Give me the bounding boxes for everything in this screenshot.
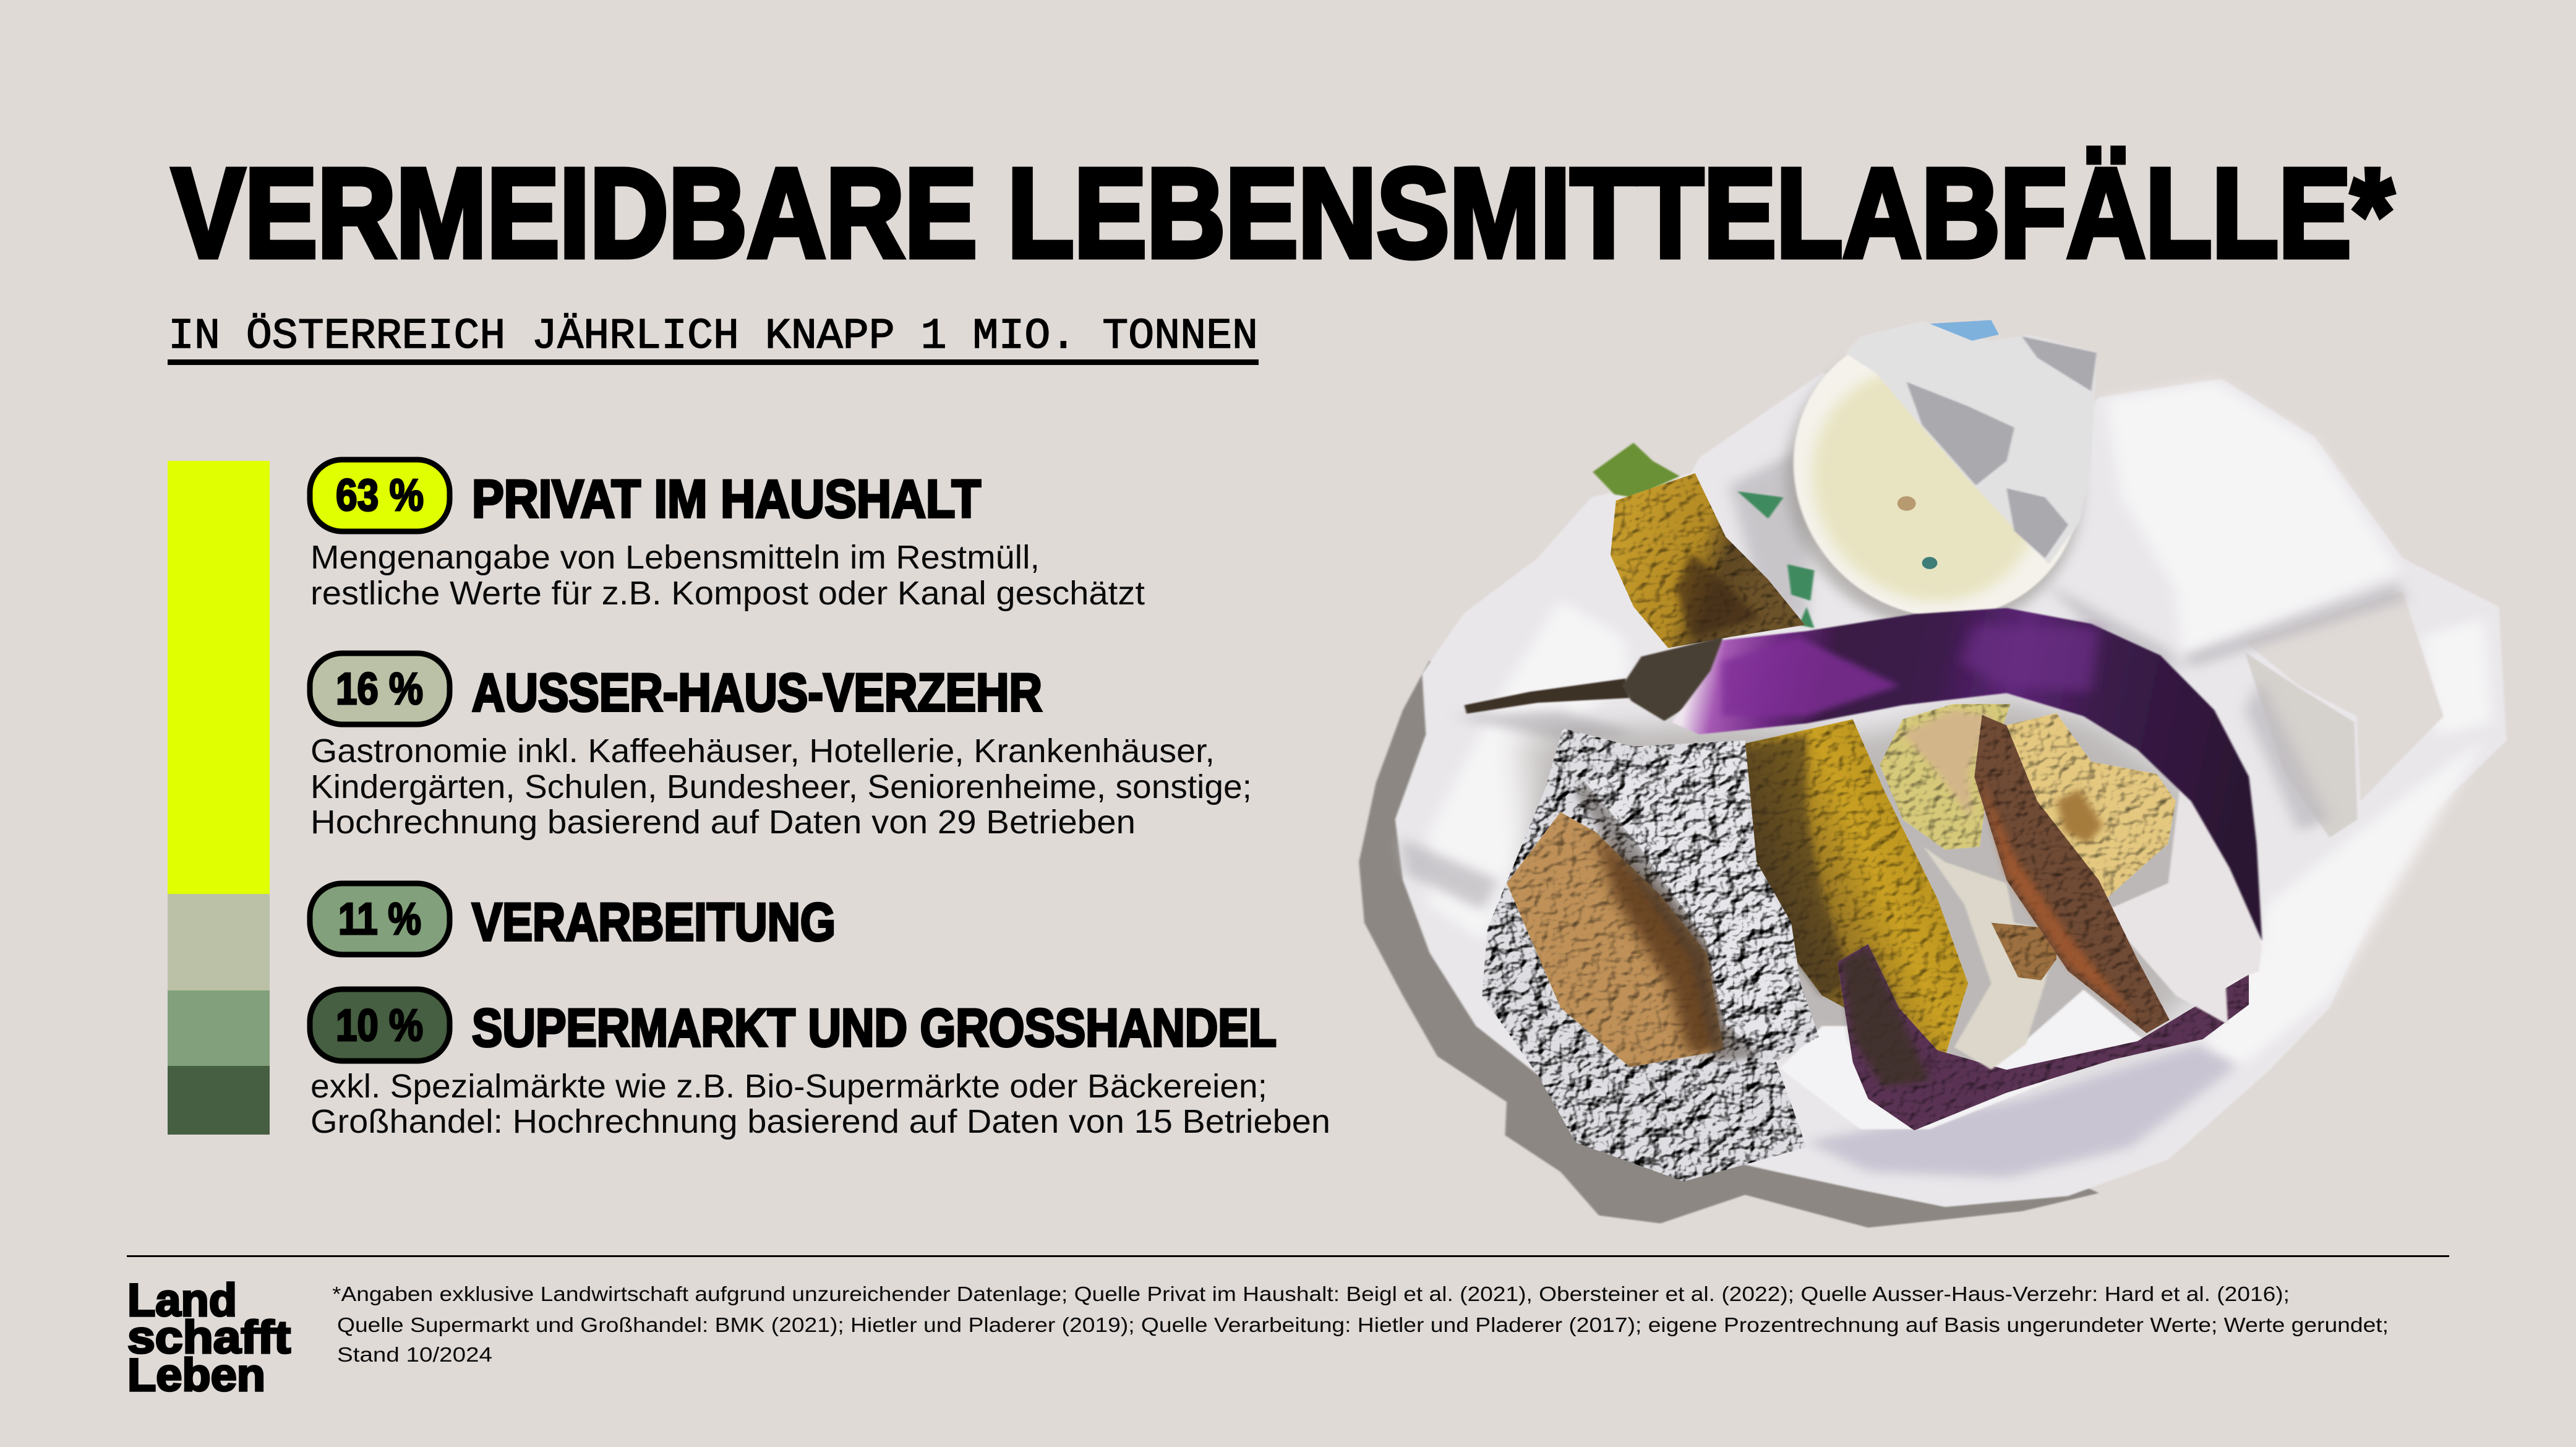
magenta lower sheen	[1722, 637, 1899, 716]
bright sheen	[1961, 625, 2099, 692]
food contact shadows	[1522, 698, 2245, 1093]
purple eggplant	[1465, 608, 2262, 941]
carrot body	[1974, 715, 2170, 1033]
heading verarbeitung: VERARBEITUNG	[472, 893, 836, 952]
description supermarkt: exkl. Spezialmärkte wie z.B. Bio-Supermärkte oder Bäckereien;	[310, 1068, 1267, 1105]
footnote: Quelle Supermarkt und Großhandel: BMK (2021); Hietler und Pladerer (2019); Quelle Verarbeitung: Hietler und Pladerer (2017); eigene Prozentrechnung auf Basis ungerundeter Werte; Werte gerundet;	[337, 1313, 2389, 1336]
dark rot streak	[1676, 552, 1760, 637]
subtitle with underline: IN ÖSTERREICH JÄHRLICH KNAPP 1 MIO. TONNEN	[168, 312, 1258, 361]
logo: Land schafft Leben: Leben	[127, 1349, 265, 1401]
squash body	[1737, 719, 1968, 1057]
cup inside	[1790, 355, 2062, 616]
cup rim	[1770, 314, 2105, 632]
bread slice	[1507, 812, 1724, 1067]
description supermarkt: Großhandel: Hochrechnung basierend auf Daten von 15 Betrieben	[310, 1103, 1330, 1140]
item: privat im haushalt	[310, 460, 1145, 612]
item: ausser-haus-verzehr	[310, 653, 1252, 841]
description privat: Mengenangabe von Lebensmitteln im Restmüll,	[310, 539, 1040, 576]
rotten eggplant bottom	[1838, 944, 2249, 1130]
heading privat: PRIVAT IM HAUSHALT	[472, 470, 981, 529]
eggplant body	[1838, 944, 2249, 1130]
spots	[1898, 496, 1916, 511]
badge 11 %: 11 %	[338, 895, 421, 944]
description ausser-haus	[310, 732, 1252, 841]
apple right	[1980, 713, 2176, 898]
apple halves	[1880, 704, 2176, 898]
footer rule	[127, 1255, 2449, 1257]
foil lid grey patches	[1907, 337, 2097, 558]
yoghurt cup	[1763, 314, 2105, 645]
brown crumbs	[1991, 922, 2056, 981]
badge 63 %: 63 %	[336, 471, 424, 520]
bag lower shading	[1807, 1044, 2237, 1178]
body	[1672, 608, 2262, 941]
item: supermarkt und grosshandel	[310, 989, 1330, 1140]
logo: Land schafft Leben	[127, 1274, 291, 1401]
tissue paper	[2103, 789, 2262, 1024]
stacked bar chart	[168, 461, 270, 1135]
body	[1611, 473, 1805, 648]
dark rot edge	[1737, 734, 1853, 995]
calyx	[1622, 637, 1730, 721]
description ausser-haus: Gastronomie inkl. Kaffeehäuser, Hotellerie, Krankenhäuser,	[310, 732, 1215, 770]
stalk	[1465, 679, 1630, 714]
bag cast shadow	[1359, 660, 2099, 1227]
white bag interior	[1780, 989, 2145, 1129]
bag handle hole	[2245, 591, 2444, 801]
stem	[1593, 443, 1680, 497]
foil lid	[1845, 321, 2097, 564]
plastic bag	[1395, 373, 2507, 1207]
footnote: Stand 10/2024	[337, 1343, 492, 1366]
orange edge	[1977, 771, 2137, 1020]
description ausser-haus: Hochrechnung basierend auf Daten von 29 Betrieben	[310, 804, 1136, 841]
badge 10 %	[310, 989, 450, 1061]
heading supermarkt: SUPERMARKT UND GROSSHANDEL	[472, 998, 1277, 1058]
green print on bag	[1737, 491, 1814, 628]
logo: Land schafft Leben: Land	[127, 1274, 237, 1326]
large yellow squash	[1737, 719, 1968, 1057]
apple core	[2056, 789, 2103, 844]
footnote: *Angaben exklusive Landwirtschaft aufgrund unzureichender Datenlage; Quelle Privat im Haushalt: Beigl et al. (2021), Obersteiner et al. (2022); Quelle Ausser-Haus-Verzehr: Hard et al. (2016);	[332, 1282, 2290, 1305]
foil base	[1482, 728, 1819, 1182]
heading ausser-haus: AUSSER-HAUS-VERZEHR	[472, 663, 1042, 723]
description privat: restliche Werte für z.B. Kompost oder Kanal geschätzt	[310, 575, 1145, 612]
description ausser-haus: Kindergärten, Schulen, Bundesheer, Seniorenheime, sonstige;	[310, 768, 1252, 805]
aluminium foil and bread	[1482, 728, 1819, 1182]
badge 16 %: 16 %	[336, 664, 423, 714]
item: verarbeitung	[310, 883, 836, 955]
illustration: food waste in plastic bag	[1359, 314, 2507, 1227]
yellow squash top	[1593, 443, 1805, 648]
old carrot	[1974, 715, 2170, 1033]
apple left	[1880, 704, 2011, 850]
garlic skin	[1923, 847, 2056, 1070]
footnote	[332, 1282, 2389, 1366]
bag crease shadows	[1399, 443, 2407, 911]
badge 11 %	[310, 883, 450, 955]
badge 63 %	[310, 460, 450, 531]
brown rot	[1841, 947, 1930, 1087]
apple left flesh	[1902, 710, 1991, 820]
blue label	[1930, 320, 1999, 341]
shade under foil flap	[1576, 780, 1760, 1062]
cup shadow	[1763, 326, 2103, 645]
badge 16 %	[310, 653, 450, 724]
logo: Land schafft Leben: schafft	[127, 1312, 291, 1363]
bag body	[1395, 373, 2507, 1207]
badge 10 %: 10 %	[336, 1001, 423, 1050]
foil flap	[1583, 741, 1799, 1050]
see-through bag flap	[2245, 652, 2357, 838]
bread shadow	[1595, 831, 1724, 1054]
description supermarkt	[310, 1068, 1330, 1140]
bag highlights	[1430, 382, 2491, 1068]
description privat	[310, 539, 1145, 612]
